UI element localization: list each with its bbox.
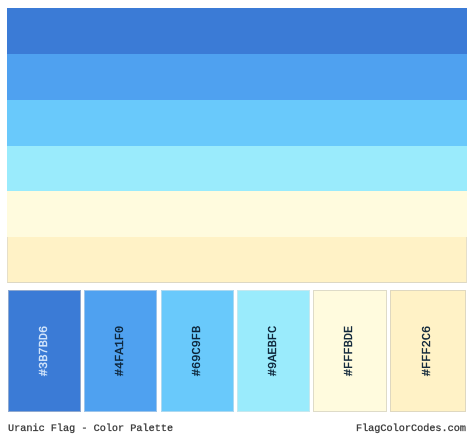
stripe: #3B7BD6 [7, 8, 467, 54]
swatch: #3B7BD6 [8, 290, 81, 412]
caption: palette title: Uranic Flag - Color Palette [8, 424, 173, 435]
swatch: #FFF2C6 [390, 290, 466, 412]
swatch: #69C9FB [161, 290, 234, 412]
swatch: #FFFBDE [313, 290, 387, 412]
stripe: #9AEBFC [7, 146, 467, 191]
flag with six horizontal stripes [7, 8, 467, 283]
hex label: #9AEBFC: #9AEBFC [266, 326, 280, 376]
stripe: #4FA1F0 [7, 54, 467, 100]
stripe: #FFF2C6 [7, 237, 467, 283]
hex label: #4FA1F0: #4FA1F0 [112, 326, 126, 376]
stripe: #69C9FB [7, 100, 467, 146]
hex label: #FFFBDE: #FFFBDE [342, 326, 356, 376]
caption: site name: FlagColorCodes.com [356, 424, 466, 435]
stripe: #FFFBDE [7, 191, 467, 237]
swatch: #9AEBFC [237, 290, 310, 412]
swatch: #4FA1F0 [84, 290, 157, 412]
hex label: #69C9FB: #69C9FB [190, 326, 204, 376]
hex label: #3B7BD6: #3B7BD6 [36, 326, 50, 376]
hex label: #FFF2C6: #FFF2C6 [420, 326, 434, 376]
